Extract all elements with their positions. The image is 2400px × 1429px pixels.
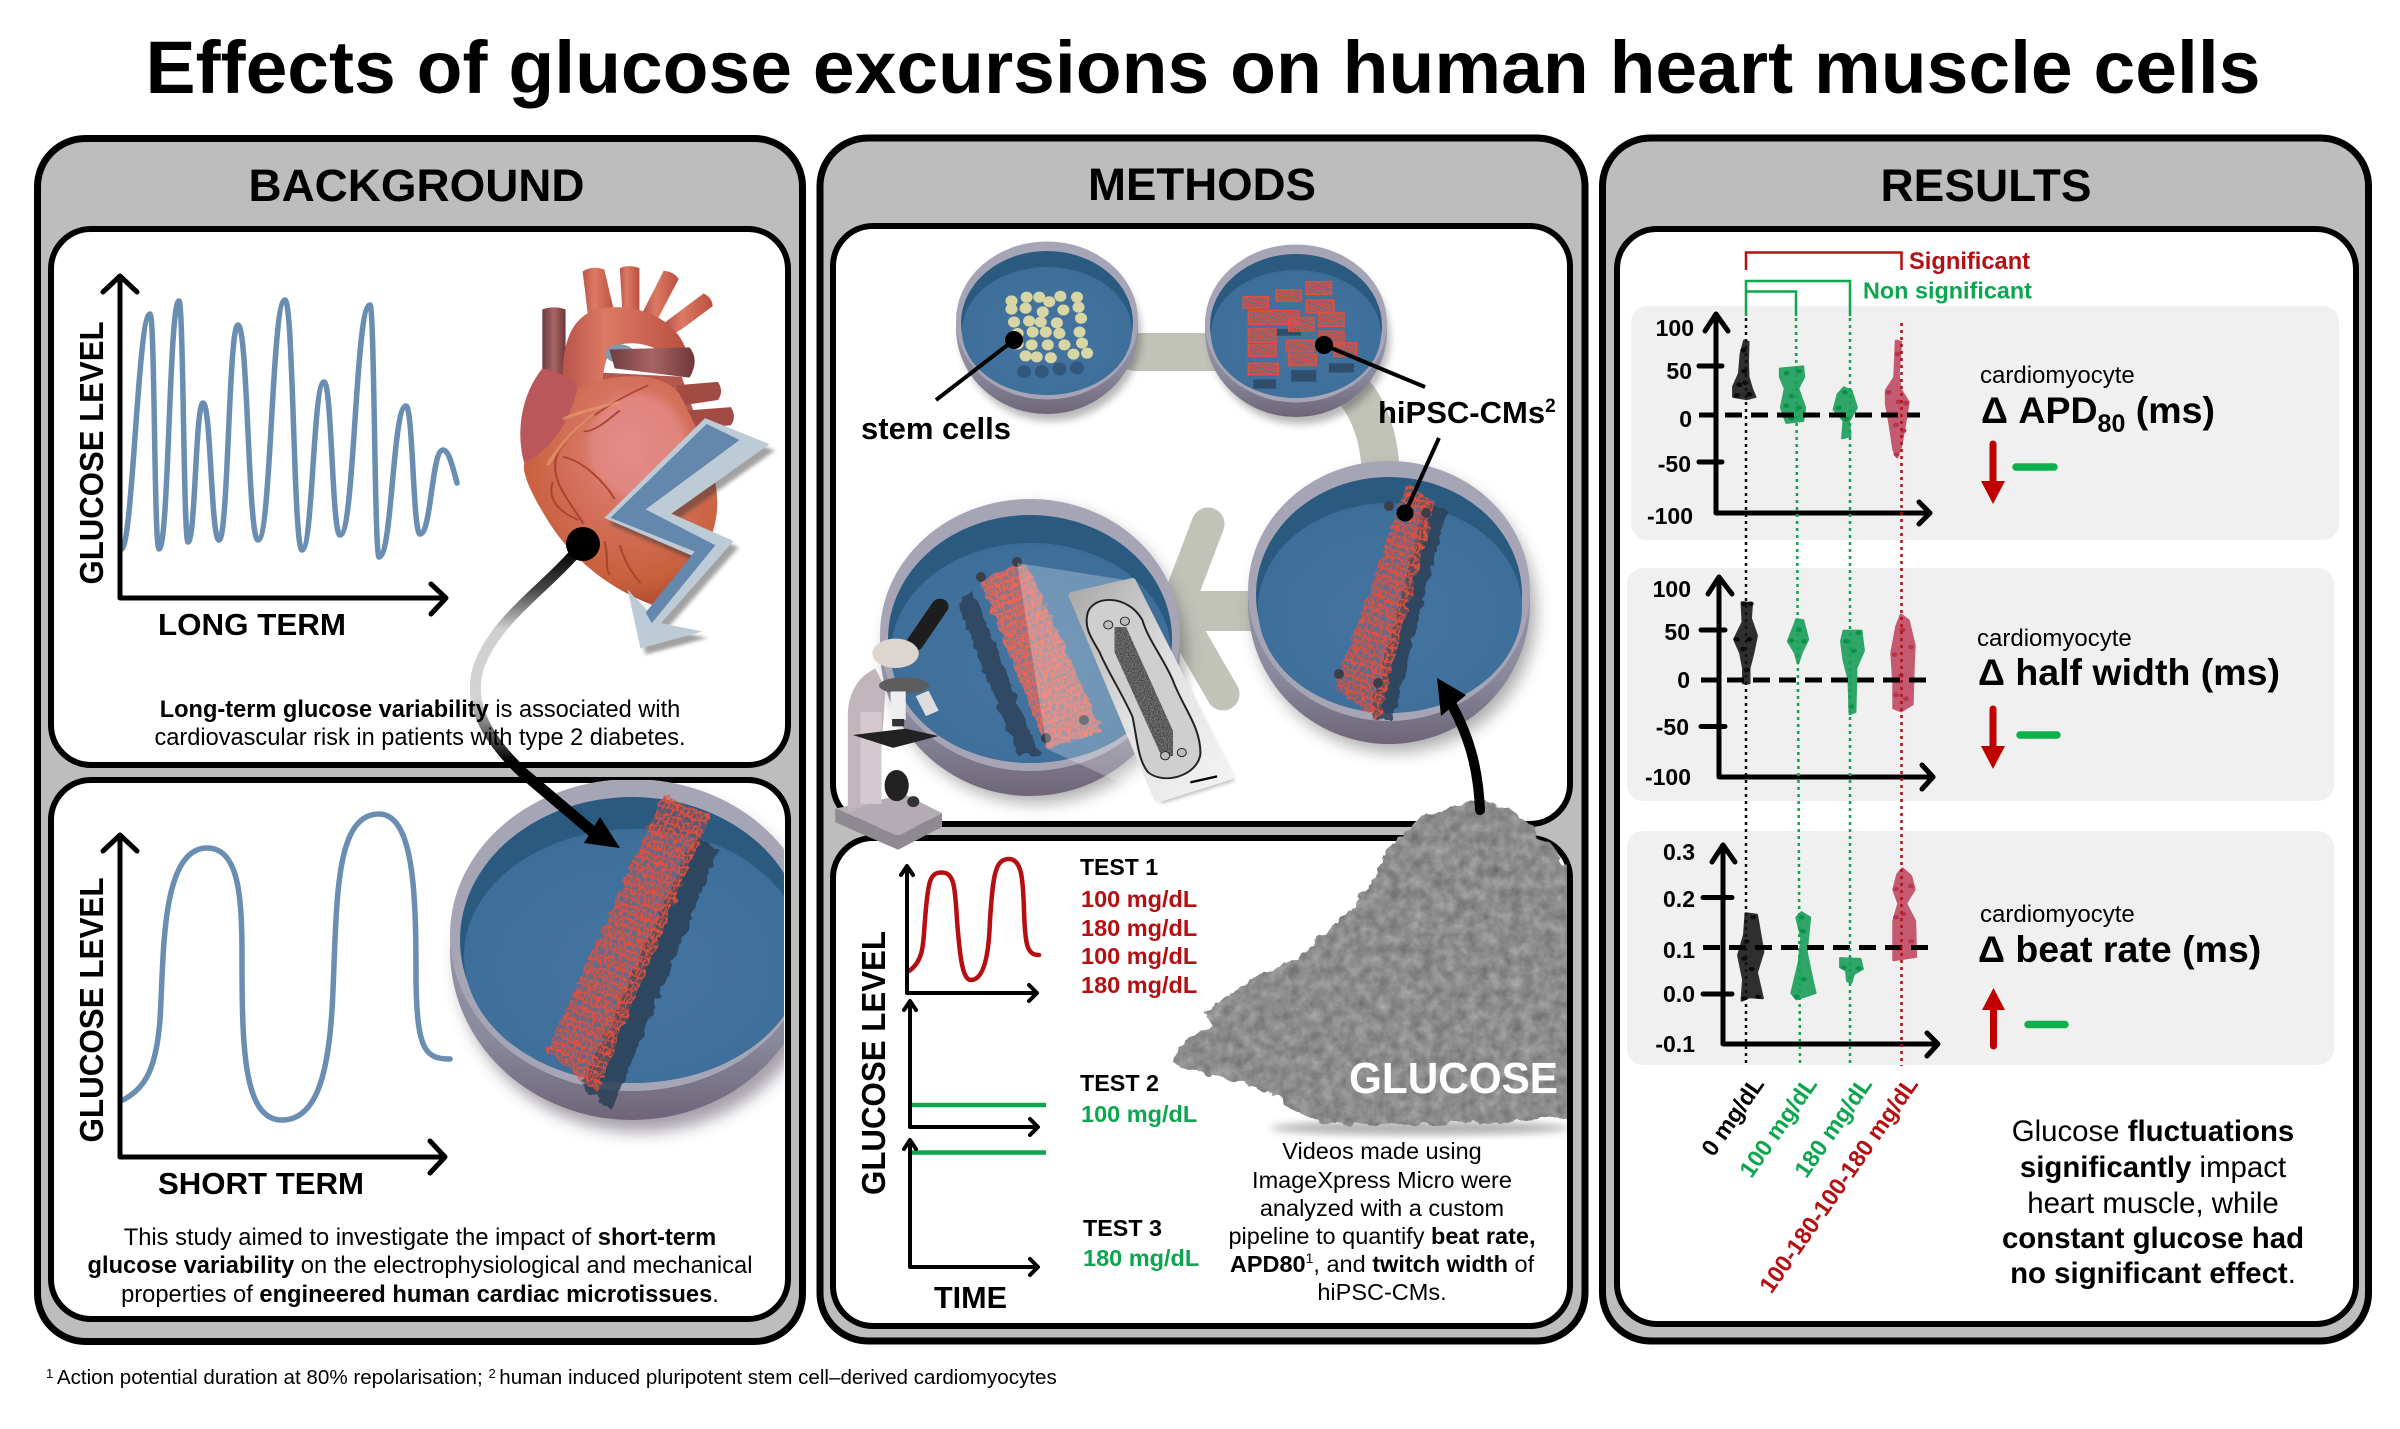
chart: long-term glucose curve [73, 276, 457, 642]
chart: APD80 violin plot: 0 [1679, 406, 1692, 432]
chart: long-term glucose curve: LONG TERM [158, 607, 346, 642]
label: hiPSC-CMs: hiPSC-CMs [1378, 395, 1545, 430]
text: beat rate result: Δ beat rate (ms) [1978, 928, 2261, 970]
x axis labels: treatments: 0 mg/dL [1696, 1072, 1769, 1161]
text: beat rate result: cardiomyocyte [1980, 901, 2135, 928]
guide lines: treatment columns [1746, 318, 1902, 1066]
text: test 1: 100 mg/dL [1081, 943, 1197, 969]
illustration: dish with stem cells [936, 242, 1141, 421]
text: test 1: 180 mg/dL [1081, 915, 1197, 941]
text: conclusion: no significant effect. [2010, 1257, 2296, 1290]
illustration: heart with lightning bolt [520, 266, 775, 655]
text: video analysis [1228, 1138, 1536, 1305]
text: APD80 result [1980, 362, 2215, 504]
text: video analysis: hiPSC-CMs. [1317, 1279, 1447, 1305]
chart: half width violin plot: 0 [1677, 667, 1690, 693]
text: test 1: 100 mg/dL [1081, 886, 1197, 912]
chart: beat rate violin plot: 0.2 [1663, 886, 1695, 912]
text: half width result: cardiomyocyte [1977, 625, 2132, 652]
card: half width background [1627, 568, 2334, 801]
text: study aim: glucose variability on the electrophysiological and mechanical [88, 1253, 752, 1279]
footnote: Action potential duration at 80% repolarisation; [57, 1366, 488, 1389]
arrow: gray workflow connectors [1135, 352, 1381, 694]
illustration: dish with engineered microtissue [1248, 438, 1536, 752]
text: test 3: TEST 3 [1083, 1215, 1162, 1241]
text: study aim [88, 1225, 752, 1308]
text: video analysis: , and [1313, 1251, 1372, 1277]
card: beat rate background [1627, 831, 2334, 1065]
chart: APD80 violin plot [1647, 314, 1930, 529]
chart: APD80 violin plot: -100 [1647, 503, 1693, 529]
arrow: heart to microtissue [475, 527, 620, 848]
chart: short-term glucose curve [73, 814, 450, 1201]
footnote: 1 [46, 1366, 57, 1381]
legend: significance brackets [1746, 249, 2032, 316]
axis label: time: TIME [934, 1280, 1007, 1315]
chart: beat rate violin plot: -0.1 [1655, 1031, 1695, 1057]
chart: long-term glucose curve: GLUCOSE LEVEL [73, 322, 110, 584]
x axis labels: treatments: 180 mg/dL [1789, 1072, 1877, 1182]
chart: short-term glucose curve: GLUCOSE LEVEL [73, 878, 110, 1142]
sub-panel: tissue workflow frame [833, 226, 1570, 824]
x axis labels: treatments: 100 mg/dL [1734, 1072, 1822, 1182]
arrow: glucose into dish [1437, 678, 1480, 810]
sub-panel: results frame [1617, 229, 2356, 1324]
text: long-term finding [154, 697, 686, 751]
chart: short-term glucose curve: SHORT TERM [158, 1166, 364, 1201]
text: half width result [1977, 625, 2280, 769]
text: conclusion: heart muscle, while [2027, 1187, 2279, 1220]
icon: lightning bolt [604, 418, 775, 655]
sub-panel: long-term frame [51, 229, 788, 765]
text: video analysis: ImageXpress Micro were [1252, 1167, 1512, 1193]
label: stem cells: stem cells [861, 411, 1011, 446]
chart: half width violin plot: -50 [1656, 714, 1689, 740]
text: conclusion: significantly impact [2020, 1151, 2286, 1184]
text: conclusion: constant glucose had [2002, 1222, 2304, 1255]
heading: methods: METHODS [1088, 159, 1316, 210]
heading: results: RESULTS [1880, 160, 2092, 211]
chart: beat rate violin plot [1655, 839, 1938, 1057]
text: test 1: TEST 1 [1080, 854, 1158, 880]
chart: APD80 violin plot: 100 [1656, 315, 1694, 341]
illustration: glucose pile: GLUCOSE [1349, 1054, 1558, 1103]
illustration: dish with hiPSC-CMs [1205, 244, 1425, 424]
chart: half width violin plot: 100 [1653, 576, 1691, 602]
text: test 2: TEST 2 [1080, 1070, 1159, 1096]
illustration: glucose pile [1173, 799, 1575, 1135]
chart: beat rate violin plot: 0.3 [1663, 839, 1695, 865]
illustration: dish under microscope with microtissue [880, 499, 1186, 803]
chart: test 2 constant glucose [904, 1001, 1046, 1135]
text: test 2 [1080, 1070, 1197, 1127]
axis label: glucose level: GLUCOSE LEVEL [855, 931, 892, 1195]
text: APD80 result: (ms) [2125, 389, 2215, 431]
panel: methods [820, 138, 1585, 1341]
sub-panel: glucose tests frame [833, 838, 1570, 1326]
chart: APD80 violin plot: -50 [1658, 451, 1691, 477]
label: hiPSC-CMs: 2 [1545, 396, 1556, 417]
text: APD80 result: Δ APD [1981, 389, 2098, 431]
chart: test 1 fluctuating glucose [901, 859, 1039, 1001]
panel: results [1602, 138, 2368, 1341]
footnote: human induced pluripotent stem cell–derived cardiomyocytes [499, 1366, 1057, 1389]
chart: APD80 violin plot: 50 [1666, 358, 1692, 384]
text: conclusion: Glucose fluctuations [2012, 1115, 2294, 1148]
text: study aim: This study aimed to investigate the impact of short-term [124, 1225, 716, 1251]
text: video analysis: 1 [1306, 1250, 1314, 1266]
text: test 1: 180 mg/dL [1081, 972, 1197, 998]
chart: beat rate violin plot: 0.1 [1663, 937, 1695, 963]
text: beat rate result [1978, 901, 2261, 1046]
text: test 3: 180 mg/dL [1083, 1245, 1199, 1271]
heart [520, 266, 734, 606]
legend: significance brackets: Significant [1909, 249, 2030, 275]
illustration: microtissue micrograph [1072, 581, 1235, 804]
card: APD80 background [1631, 306, 2339, 540]
title: Effects of glucose excursions on human heart muscle cells [146, 26, 2260, 109]
chart: half width violin plot [1645, 576, 1933, 790]
illustration: microscope [835, 607, 942, 850]
text: long-term finding: cardiovascular risk in patients with type 2 diabetes. [154, 725, 686, 751]
sub-panel: short-term frame [51, 780, 788, 1319]
footnote: 2 [488, 1366, 499, 1381]
illustration: petri dish with microtissue [450, 779, 822, 1132]
x axis labels: treatments: 100-180-100-180 mg/dL [1754, 1072, 1923, 1298]
chart: half width violin plot: -100 [1645, 764, 1691, 790]
text: video analysis: analyzed with a custom [1260, 1195, 1504, 1221]
heading: background: BACKGROUND [248, 160, 584, 211]
text: conclusion [2002, 1115, 2304, 1290]
text: long-term finding: Long-term glucose variability is associated with [160, 697, 680, 723]
text: test 1 [1080, 854, 1197, 998]
chart: half width violin plot: 50 [1664, 619, 1690, 645]
text: video analysis: Videos made using [1282, 1138, 1482, 1164]
text: test 3 [1083, 1215, 1199, 1271]
chart: beat rate violin plot: 0.0 [1663, 981, 1695, 1007]
panel: background [38, 138, 822, 1342]
text: video analysis: pipeline to quantify beat rate, [1228, 1223, 1536, 1249]
chart: test 3 constant glucose [904, 1140, 1046, 1275]
text: APD80 result: cardiomyocyte [1980, 362, 2135, 389]
text: study aim: properties of engineered human cardiac microtissues. [121, 1282, 719, 1308]
text: video analysis: twitch width of [1372, 1251, 1534, 1277]
text: test 2: 100 mg/dL [1081, 1101, 1197, 1127]
text: half width result: Δ half width (ms) [1978, 651, 2280, 693]
text: video analysis: APD80 [1230, 1251, 1306, 1277]
legend: significance brackets: Non significant [1863, 278, 2032, 304]
text: APD80 result: 80 [2098, 410, 2125, 438]
